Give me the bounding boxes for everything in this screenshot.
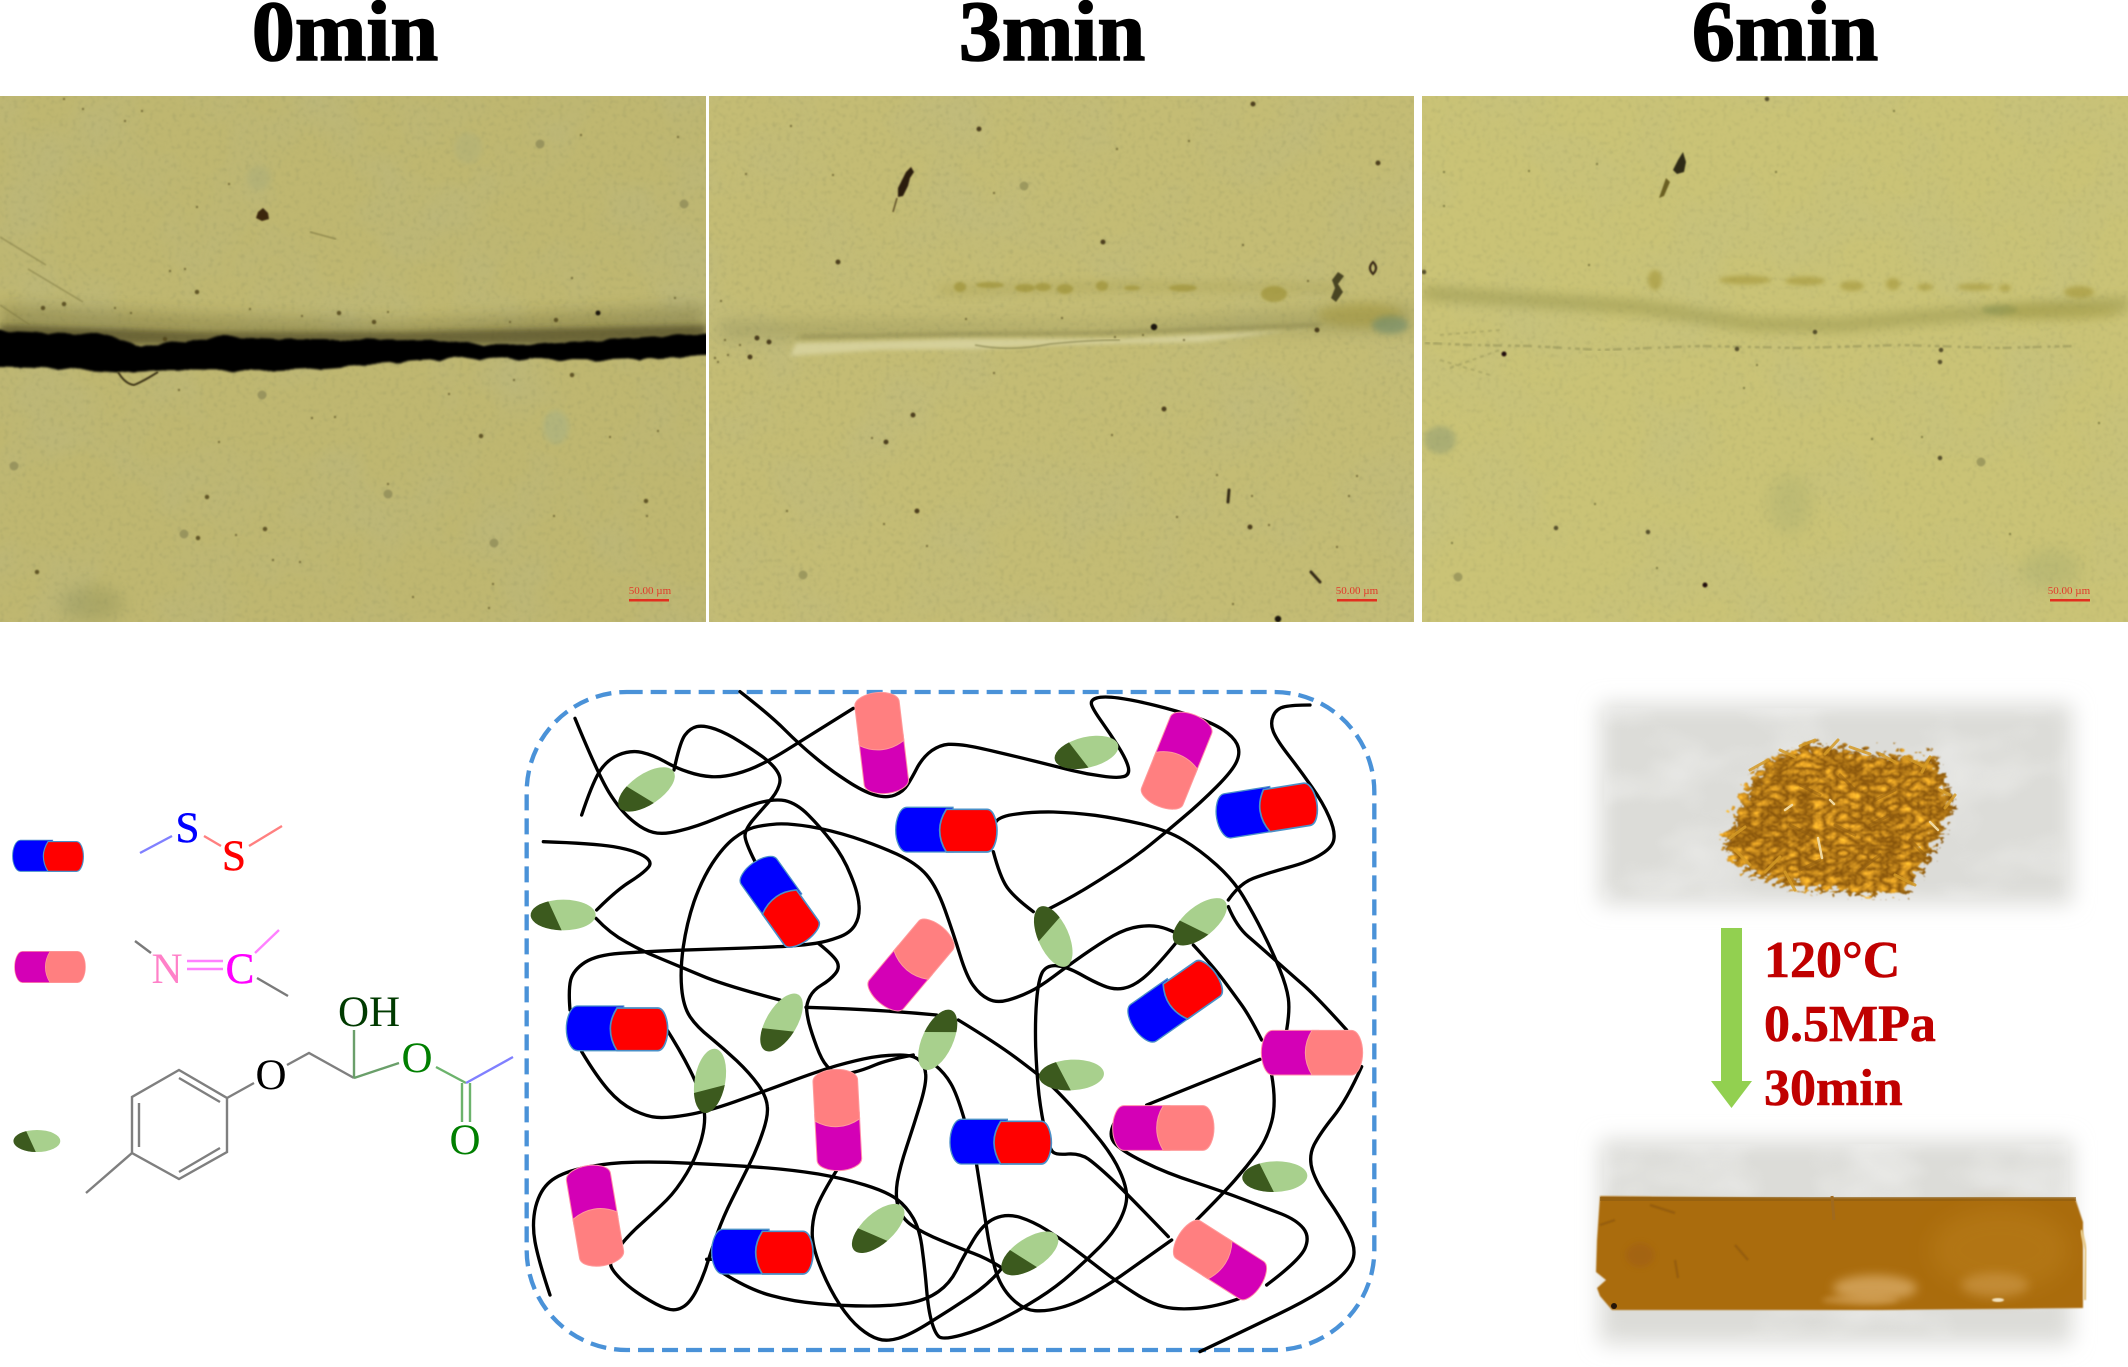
scale bar	[1336, 587, 1378, 602]
chemical structure: imine bond	[135, 930, 288, 996]
arrow: processing direction	[1711, 928, 1752, 1108]
scale bar	[629, 587, 671, 602]
panel: polymer network schematic	[527, 690, 1374, 1352]
resin fragment pile	[1716, 738, 1955, 890]
legend icon: ester leaf	[13, 1130, 60, 1152]
panel: micrograph at 6 min with nearly healed crack	[1422, 96, 2128, 622]
open crack	[0, 329, 712, 371]
chemical structure: disulfide bond: S	[176, 805, 199, 852]
chemical structure: disulfide bond	[140, 805, 282, 880]
scale bar: 50.00 µm	[2048, 585, 2091, 597]
text block: hot press conditions: 30min	[1764, 1060, 1903, 1117]
legend icon: disulfide capsule	[13, 840, 83, 871]
chemical structure: disulfide bond: S	[222, 833, 246, 880]
text block: hot press conditions: 0.5MPa	[1764, 996, 1936, 1053]
panel: photo of broken resin fragments	[1600, 704, 2072, 904]
text block: hot press conditions: 120°C	[1764, 932, 1900, 989]
chemical structure: hydroxy ester linkage	[86, 989, 513, 1193]
panel: legend of network components	[13, 805, 513, 1193]
chemical structure: imine bond: N	[151, 946, 183, 993]
panel: photo of remolded resin strip	[1596, 1140, 2086, 1344]
remolded resin strip	[1596, 1196, 2086, 1310]
dashed network boundary	[527, 692, 1374, 1350]
imine capsules	[565, 690, 1363, 1305]
chemical structure: hydroxy ester linkage: O	[401, 1035, 433, 1082]
legend icon: imine capsule	[15, 951, 85, 983]
polymer chains	[533, 692, 1362, 1352]
text block: hot press conditions	[1764, 932, 1936, 1117]
scale bar: 50.00 µm	[629, 585, 672, 597]
ester leaves	[531, 730, 1308, 1284]
panel: micrograph at 0 min with open crack	[0, 96, 712, 622]
disulfide capsules	[566, 780, 1320, 1274]
chemical structure: hydroxy ester linkage: O	[255, 1052, 287, 1099]
scale bar	[2048, 587, 2090, 602]
chemical structure: hydroxy ester linkage: O	[449, 1117, 481, 1164]
chemical structure: imine bond: C	[226, 946, 254, 993]
scale bar: 50.00 µm	[1336, 585, 1379, 597]
chemical structure: hydroxy ester linkage: OH	[338, 989, 400, 1036]
panel: micrograph at 3 min with healing crack	[709, 96, 1414, 622]
